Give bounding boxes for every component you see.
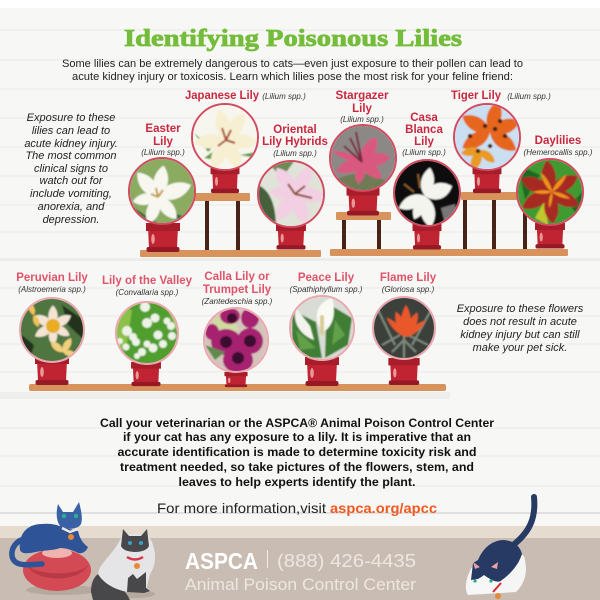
ASPCA logo text: ASPCA <box>185 548 258 574</box>
label: Peruvian Lily: (Alstroemeria spp.) <box>18 285 86 294</box>
ASPCA logo text <box>185 548 416 594</box>
label: Stargazer Lily: Stargazer <box>336 90 389 102</box>
plant: Flame lily <box>373 297 435 385</box>
call to action text: Call your veterinarian or the ASPCA® Animal Poison Control Center <box>100 417 495 430</box>
more information link <box>157 500 437 516</box>
callout: kidney injury lilies: watch out for <box>40 175 104 187</box>
label: Peruvian Lily <box>16 272 88 294</box>
label: Stargazer Lily: (Lilium spp.) <box>340 115 384 124</box>
label: Lily of the Valley <box>102 275 193 297</box>
call to action text <box>100 417 495 489</box>
label: Peace Lily: (Spathiphyllum spp.) <box>290 285 363 294</box>
callout: other flowers: does not result in acute <box>463 316 577 328</box>
callout: kidney injury lilies: anorexia, and <box>38 201 105 213</box>
label: Peace Lily: Peace Lily <box>298 272 355 284</box>
shelf: first row right <box>330 192 568 256</box>
label: Easter Lily: Easter <box>145 123 181 135</box>
label: Lily of the Valley: (Convallaria spp.) <box>116 288 179 297</box>
illustration: siamese cat <box>91 529 155 600</box>
plant: Peace lily <box>290 296 354 386</box>
plant: Stargazer lily <box>328 124 398 216</box>
label: Flame Lily <box>380 272 437 294</box>
shelf: first row left <box>140 193 321 257</box>
label: Calla Lily or Trumpet Lily: Trumpet Lily <box>203 284 272 296</box>
call to action text: leaves to help experts identify the plant. <box>178 476 416 489</box>
label: Japanese Lily: Japanese Lily <box>185 90 260 102</box>
label: Japanese Lily: (Lilium spp.) <box>262 92 306 101</box>
title: Identifying Poisonous Lilies <box>124 26 462 52</box>
label: Lily of the Valley: Lily of the Valley <box>102 275 193 287</box>
label: Easter Lily <box>141 123 185 157</box>
call to action text: if your cat has any exposure to a lily. It is imperative that an <box>123 431 471 444</box>
callout: other flowers <box>457 303 584 354</box>
label: Casa Blanca Lily: (Lilium spp.) <box>402 148 446 157</box>
plant: Japanese lily <box>190 100 260 193</box>
label: Tiger Lily: Tiger Lily <box>451 90 502 102</box>
label: Easter Lily: (Lilium spp.) <box>141 148 185 157</box>
label: Casa Blanca Lily: Casa <box>410 112 438 124</box>
callout: kidney injury lilies: Exposure to these <box>27 112 115 124</box>
intro text <box>62 58 523 83</box>
footer band <box>0 526 600 600</box>
callout: kidney injury lilies <box>24 112 118 226</box>
label: Japanese Lily <box>185 90 306 102</box>
plant: Easter lily <box>128 158 198 252</box>
label: Calla Lily or Trumpet Lily <box>202 271 273 306</box>
label: Calla Lily or Trumpet Lily: Calla Lily or <box>204 271 270 283</box>
plant: Tiger lily <box>452 99 523 193</box>
label: Casa Blanca Lily: Blanca <box>405 124 443 136</box>
plant: Daylilies <box>515 158 585 249</box>
label: Peruvian Lily: Peruvian Lily <box>16 272 88 284</box>
illustration: blue cat on red cushion <box>12 502 98 595</box>
more information link: aspca.org/apcc <box>330 500 437 516</box>
label: Daylilies: (Hemerocallis spp.) <box>524 148 593 157</box>
label: Easter Lily: Lily <box>153 136 174 148</box>
call to action text: treatment needed, so take pictures of the flowers, stem, and <box>120 461 474 474</box>
illustration: tuxedo cat <box>466 497 534 599</box>
callout: other flowers: make your pet sick. <box>473 342 567 354</box>
label: Calla Lily or Trumpet Lily: (Zantedeschia spp.) <box>202 297 273 306</box>
call to action text: accurate identification is made to determine toxicity risk and <box>118 446 476 459</box>
label: Stargazer Lily <box>336 90 389 124</box>
shelf: second row <box>29 384 446 391</box>
label: Daylilies <box>524 135 593 157</box>
ASPCA logo text: Animal Poison Control Center <box>185 575 416 594</box>
label: Oriental Lily Hybrids: (Lilium spp.) <box>273 149 317 158</box>
plant: Oriental lily hybrids <box>256 160 327 250</box>
label: Flame Lily: Flame Lily <box>380 272 437 284</box>
label: Peace Lily <box>290 272 363 294</box>
intro text: Some lilies can be extremely dangerous to cats—even just exposure to their pollen can lead to <box>62 58 523 70</box>
callout: kidney injury lilies: lilies can lead to <box>32 125 110 137</box>
label: Daylilies: Daylilies <box>535 135 581 147</box>
label: Tiger Lily: (Lilium spp.) <box>507 92 551 101</box>
callout: other flowers: Exposure to these flowers <box>457 303 584 315</box>
label: Casa Blanca Lily <box>402 112 446 157</box>
plant: Peruvian lily <box>20 298 84 385</box>
callout: kidney injury lilies: The most common <box>25 150 117 162</box>
callout: kidney injury lilies: clinical signs to <box>34 163 108 175</box>
more information link: For more information,visit <box>157 500 326 516</box>
ASPCA logo text: (888) 426-4435 <box>277 551 416 571</box>
label: Oriental Lily Hybrids: Oriental <box>273 124 317 136</box>
callout: kidney injury lilies: include vomiting, <box>30 188 112 200</box>
plant: Calla lily <box>204 308 268 387</box>
callout: kidney injury lilies: acute kidney injury. <box>24 138 118 150</box>
callout: other flowers: kidney injury but can still <box>460 329 580 341</box>
plant: Lily of the valley <box>115 302 179 386</box>
label: Oriental Lily Hybrids <box>262 124 328 158</box>
callout: kidney injury lilies: depression. <box>43 214 99 226</box>
label: Stargazer Lily: Lily <box>352 103 373 115</box>
label: Flame Lily: (Gloriosa spp.) <box>382 285 435 294</box>
label: Tiger Lily <box>451 90 551 102</box>
plant: Casa Blanca lily <box>392 158 462 250</box>
label: Oriental Lily Hybrids: Lily Hybrids <box>262 136 328 148</box>
label: Casa Blanca Lily: Lily <box>414 136 435 148</box>
intro text: acute kidney injury or toxicosis. Learn which lilies pose the most risk for your feline friend: <box>72 71 513 83</box>
